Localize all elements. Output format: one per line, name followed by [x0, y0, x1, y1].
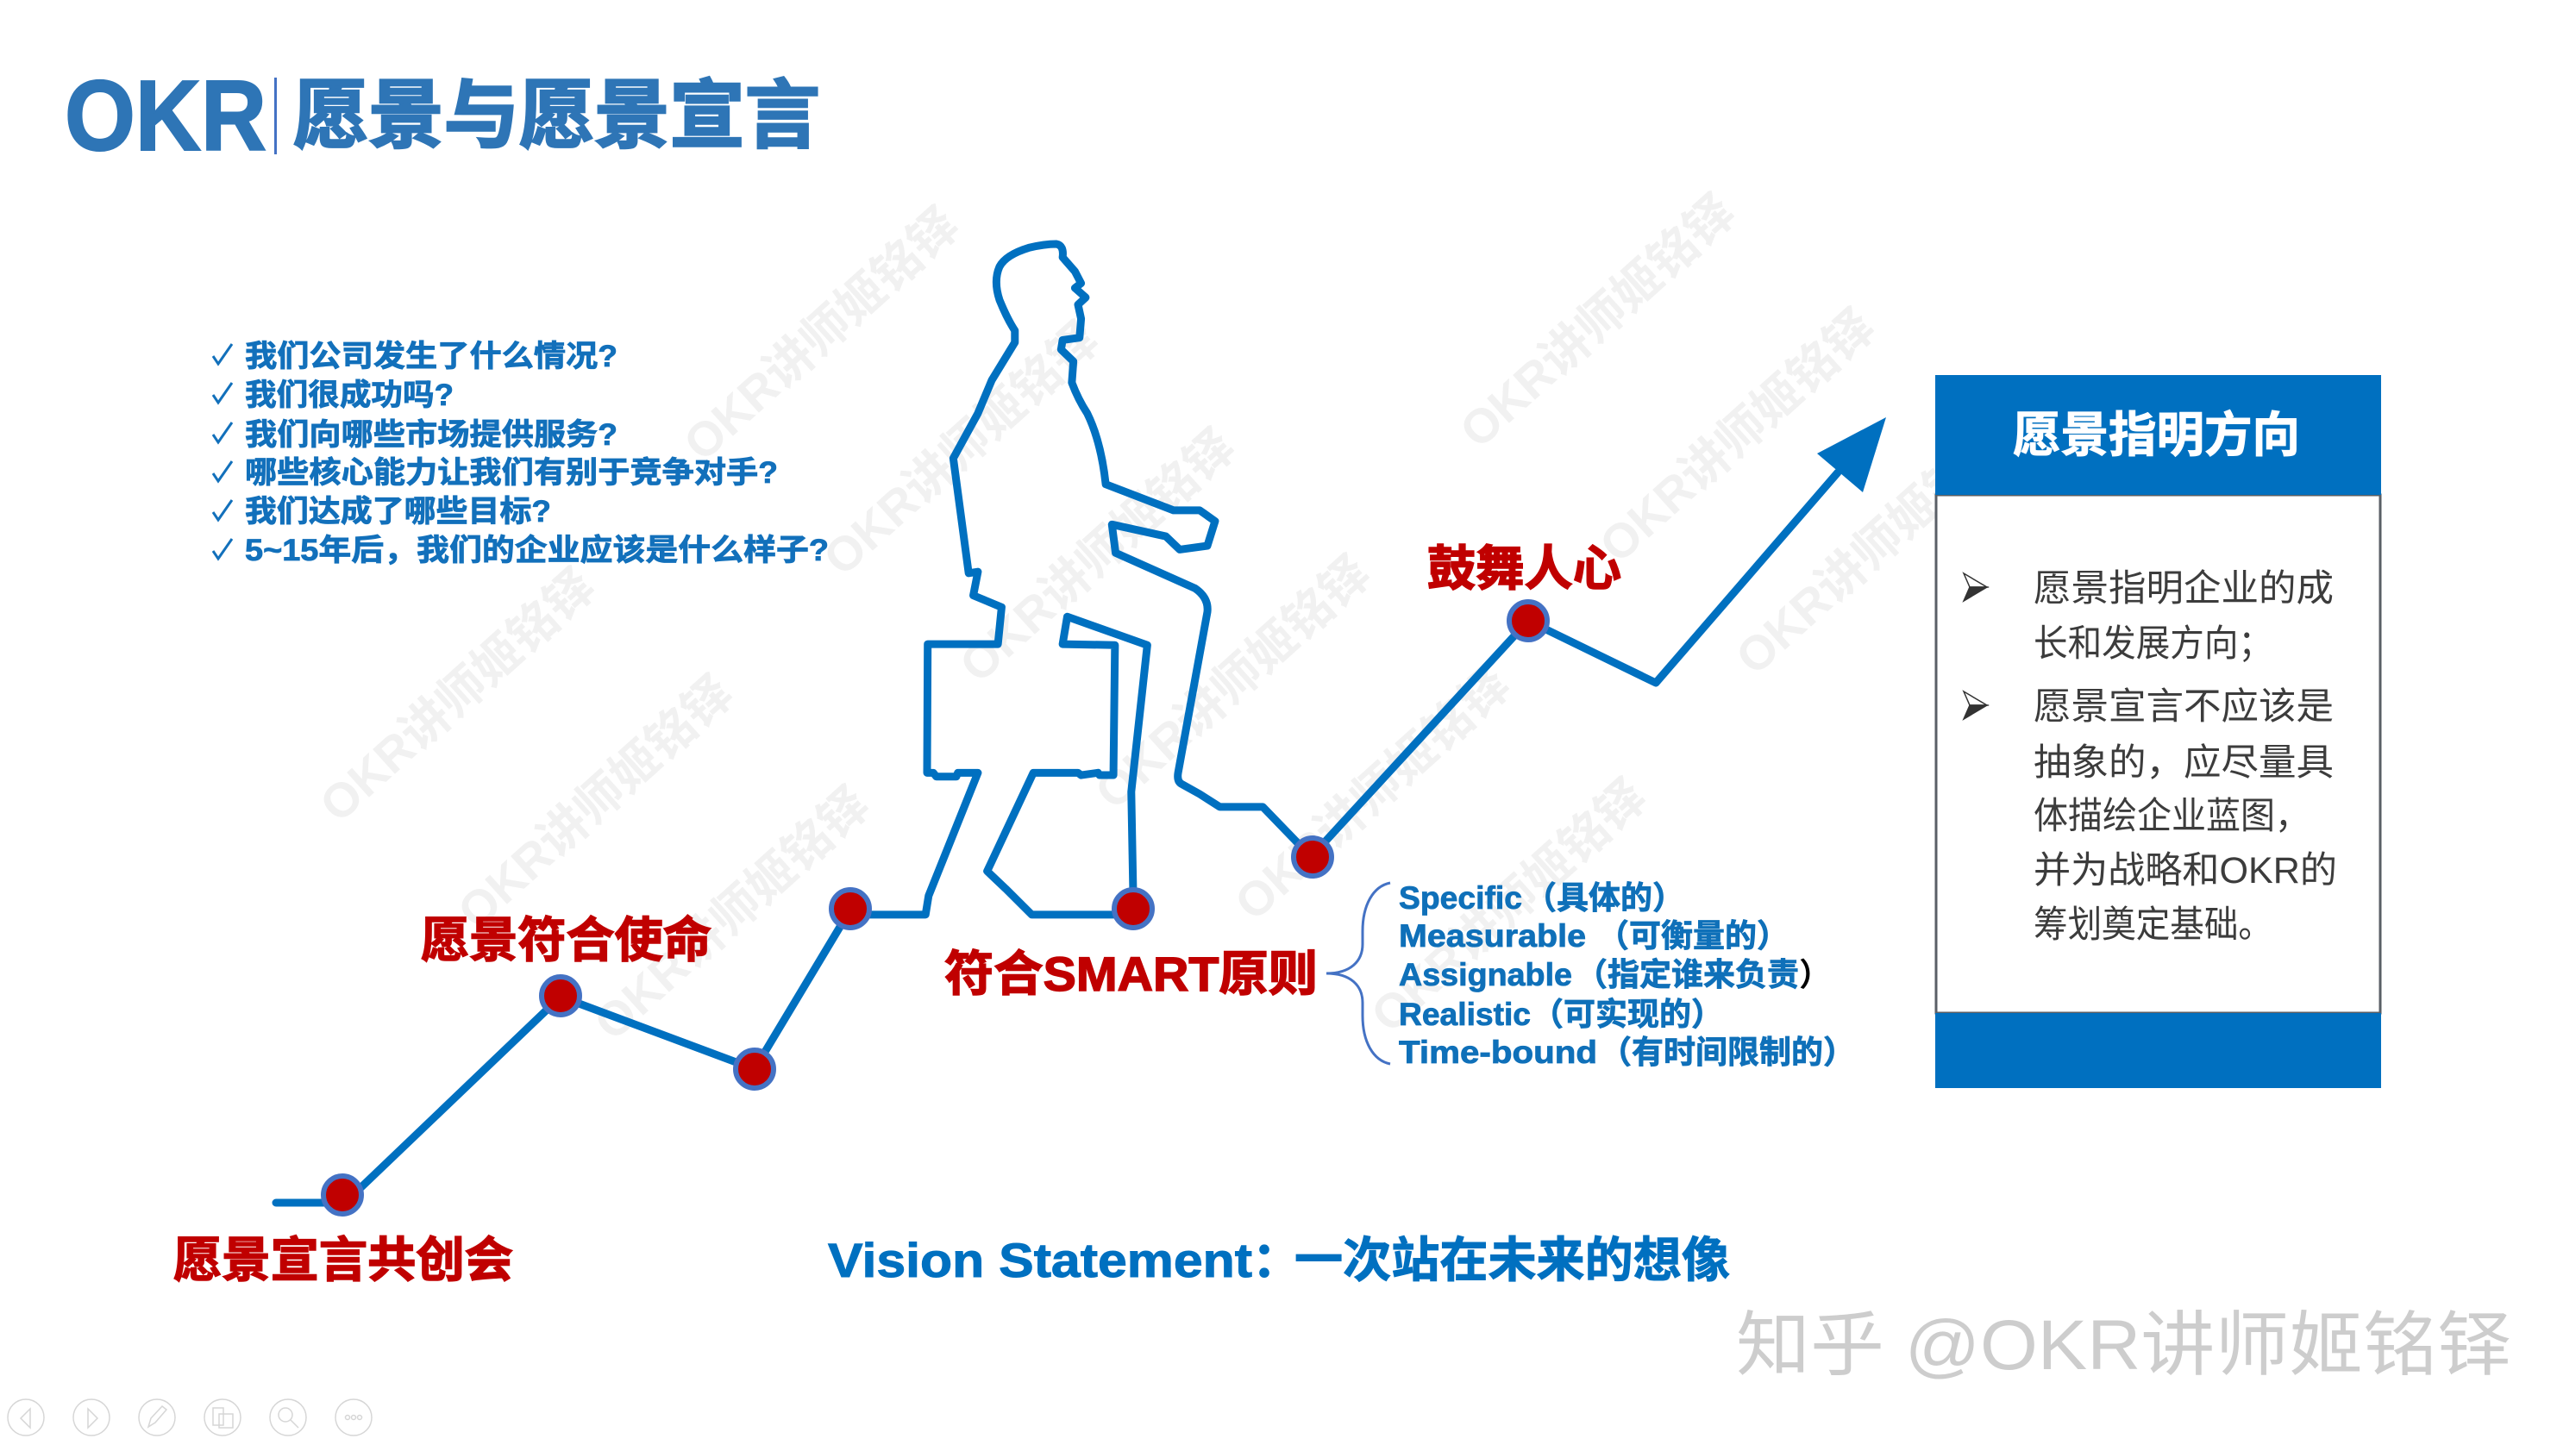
background watermarks: OKR讲师姬铭铎 — [1726, 411, 2021, 685]
label: vision co-creation: 愿景宣言共创会 — [173, 1233, 513, 1287]
icon: pen — [139, 1399, 175, 1436]
zhihu watermark: 知乎 @OKR讲师姬铭铎 — [1736, 1306, 2511, 1385]
Specific — [1399, 880, 1684, 916]
Time-bound: （有时间限制的） — [1600, 1035, 1855, 1070]
panel header — [1935, 375, 2381, 495]
question 3: 我们向哪些市场提供服务? — [245, 418, 617, 452]
title: OKR — [65, 59, 266, 172]
Assignable — [1399, 957, 1831, 992]
Time-bound — [1399, 1035, 1855, 1070]
milestone dots — [323, 602, 1547, 1214]
bullet 1: 愿景指明企业的成 — [2034, 568, 2334, 610]
background watermarks: OKR讲师姬铭铎 — [584, 777, 879, 1050]
background watermarks: OKR讲师姬铭铎 — [1589, 299, 1884, 572]
question 6: 5~15年后，我们的企业应该是什么样子? — [245, 534, 829, 567]
seated person outline — [858, 244, 1312, 915]
panel footer bar — [1935, 1013, 2381, 1088]
vision statement caption — [828, 1233, 1730, 1287]
bullet 2: 愿景宣言不应该是 — [2034, 686, 2334, 728]
icon: next — [73, 1399, 110, 1436]
background watermarks: OKR讲师姬铭铎 — [1085, 546, 1380, 819]
bullet 2: 筹划奠定基础。 — [2034, 904, 2272, 946]
icon: previous — [8, 1399, 44, 1436]
Specific: Specific — [1399, 880, 1522, 916]
bullet 1 — [1964, 568, 2334, 665]
label: SMART: 符合SMART原则 — [944, 947, 1318, 1001]
Realistic: （可实现的） — [1532, 997, 1723, 1032]
title — [65, 59, 820, 172]
panel: vision direction — [1935, 375, 2381, 1088]
question 2: 我们很成功吗? — [245, 378, 454, 412]
Measurable: Measurable — [1399, 918, 1586, 954]
vision statement caption: 一次站在未来的想像 — [1294, 1233, 1730, 1287]
background watermarks: OKR讲师姬铭铎 — [448, 666, 743, 939]
title: 愿景与愿景宣言 — [293, 74, 820, 158]
question 4: 哪些核心能力让我们有别于竞争对手? — [245, 456, 778, 490]
bullet 2: 抽象的，应尽量具 — [2034, 742, 2334, 784]
Realistic — [1399, 997, 1723, 1032]
panel header: 愿景指明方向 — [2013, 408, 2300, 462]
question 1: 我们公司发生了什么情况? — [245, 340, 617, 373]
background watermarks: OKR讲师姬铭铎 — [1225, 657, 1520, 930]
SMART list — [1399, 880, 1855, 1070]
background watermarks: OKR讲师姬铭铎 — [674, 197, 968, 471]
bullet 2: 并为战略和OKR的 — [2034, 850, 2337, 891]
Measurable — [1399, 918, 1789, 954]
icon: slides — [204, 1399, 241, 1436]
slideshow controls — [8, 1399, 372, 1436]
question 5: 我们达成了哪些目标? — [245, 495, 551, 529]
Realistic: Realistic — [1399, 997, 1531, 1032]
Assignable: Assignable — [1399, 957, 1572, 992]
Specific: （具体的） — [1525, 880, 1684, 916]
background watermarks: OKR讲师姬铭铎 — [310, 559, 605, 832]
question checklist — [213, 340, 829, 567]
Assignable: （指定谁来负责） — [1576, 957, 1831, 992]
background watermarks: OKR讲师姬铭铎 — [813, 312, 1108, 585]
Time-bound: Time-bound — [1399, 1035, 1597, 1070]
vision statement caption: ： — [1252, 1233, 1301, 1287]
background watermarks — [310, 185, 2021, 1050]
background watermarks: OKR讲师姬铭铎 — [1361, 769, 1656, 1042]
bullet 2: 体描绘企业蓝图， — [2034, 796, 2310, 837]
vision statement caption: Vision Statement — [828, 1233, 1252, 1287]
bullet 2 — [1964, 686, 2337, 946]
label: aligns with mission: 愿景符合使命 — [421, 913, 711, 967]
background watermarks: OKR讲师姬铭铎 — [950, 419, 1244, 692]
icon: more — [335, 1399, 372, 1436]
icon: search — [270, 1399, 306, 1436]
Measurable: （可衡量的） — [1597, 918, 1789, 954]
bullet 1: 长和发展方向； — [2034, 623, 2272, 665]
brace — [1326, 883, 1390, 1064]
background watermarks: OKR讲师姬铭铎 — [1450, 185, 1745, 458]
rising line with arrow — [276, 417, 1886, 1203]
label: inspiring: 鼓舞人心 — [1427, 541, 1621, 596]
